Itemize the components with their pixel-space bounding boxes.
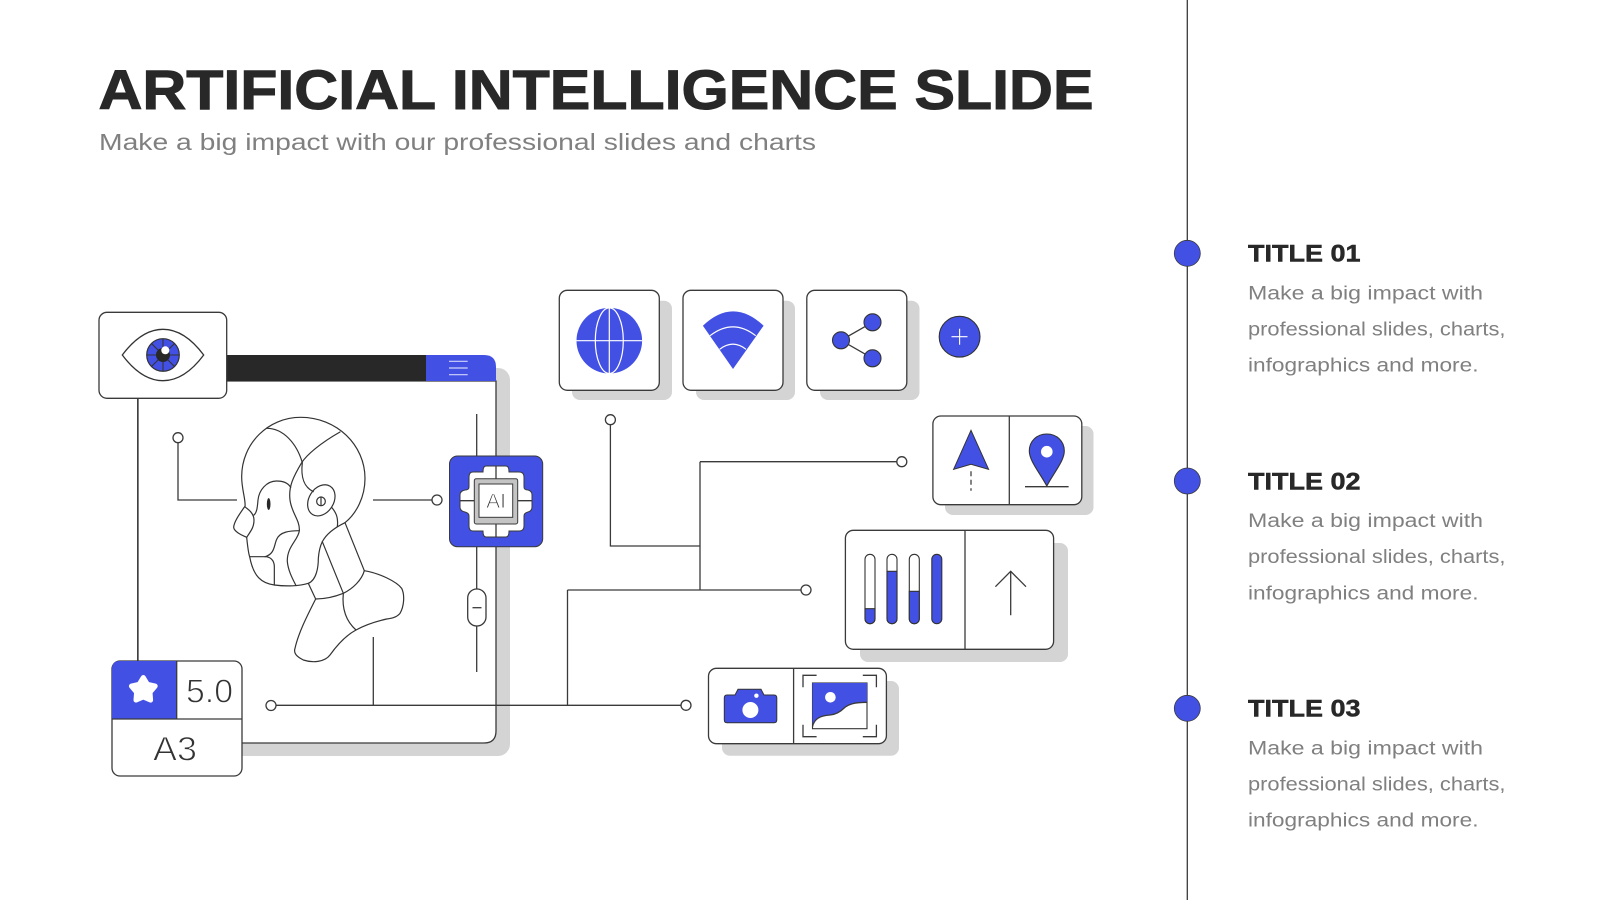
timeline dot 03 bbox=[1174, 695, 1200, 721]
text block 03: professional slides, charts, bbox=[1248, 773, 1506, 795]
rating card bbox=[112, 661, 242, 776]
window title bar bbox=[227, 355, 426, 381]
icon card: share bbox=[807, 290, 920, 400]
connector: eye card to rating card bbox=[137, 398, 139, 661]
text block 02: professional slides, charts, bbox=[1248, 546, 1506, 568]
text block 02: TITLE 02 bbox=[1248, 468, 1360, 495]
icon: navigation arrow bbox=[954, 430, 989, 491]
subtitle: Make a big impact with our professional slides and charts bbox=[99, 129, 816, 155]
icon: star bbox=[131, 678, 155, 700]
icon card: wifi bbox=[683, 290, 795, 400]
AI chip icon bbox=[450, 456, 543, 547]
text block 01: infographics and more. bbox=[1248, 355, 1478, 377]
size label: A3 bbox=[153, 731, 197, 769]
icon card: globe bbox=[559, 290, 672, 400]
sliders bbox=[865, 554, 942, 624]
rating value: 5.0 bbox=[186, 673, 233, 710]
title: ARTIFICIAL INTELLIGENCE SLIDE bbox=[98, 58, 1094, 121]
connector: head to AI chip bbox=[373, 495, 442, 505]
timeline bbox=[1174, 0, 1200, 900]
window menu button bbox=[426, 355, 496, 381]
text block 02 bbox=[1248, 468, 1506, 604]
icon: map pin bbox=[1025, 434, 1069, 487]
text block 03 bbox=[1248, 696, 1506, 832]
eye card bbox=[99, 312, 227, 398]
timeline dot 01 bbox=[1174, 240, 1200, 266]
icon: camera bbox=[724, 689, 777, 723]
text block 03: infographics and more. bbox=[1248, 810, 1478, 832]
text block 01: professional slides, charts, bbox=[1248, 318, 1506, 340]
text block 01 bbox=[1248, 241, 1506, 377]
card: sliders and upload bbox=[845, 530, 1068, 662]
icon: image frame bbox=[803, 675, 876, 737]
window shadow bbox=[150, 368, 510, 756]
connector: head to left node bbox=[173, 433, 237, 500]
text block 01: TITLE 01 bbox=[1248, 241, 1360, 268]
icon: up arrow bbox=[995, 571, 1026, 615]
text block 02: Make a big impact with bbox=[1248, 510, 1483, 532]
card: navigation and location bbox=[933, 416, 1094, 515]
text block 01: Make a big impact with bbox=[1248, 282, 1483, 304]
icon: plus button bbox=[939, 316, 980, 357]
connector network bbox=[568, 415, 907, 705]
text block 03: Make a big impact with bbox=[1248, 737, 1483, 759]
AI chip icon: AI bbox=[486, 490, 506, 513]
connector: bottom bus line bbox=[266, 637, 691, 710]
robot head line art bbox=[234, 417, 404, 662]
window frame bbox=[138, 381, 496, 743]
illustration: browser window with robot head bbox=[99, 312, 691, 776]
timeline dot 02 bbox=[1174, 468, 1200, 494]
text block 03: TITLE 03 bbox=[1248, 696, 1360, 723]
card: camera and image bbox=[708, 668, 899, 756]
text block 02: infographics and more. bbox=[1248, 582, 1478, 604]
vertical slider control bbox=[468, 414, 486, 672]
